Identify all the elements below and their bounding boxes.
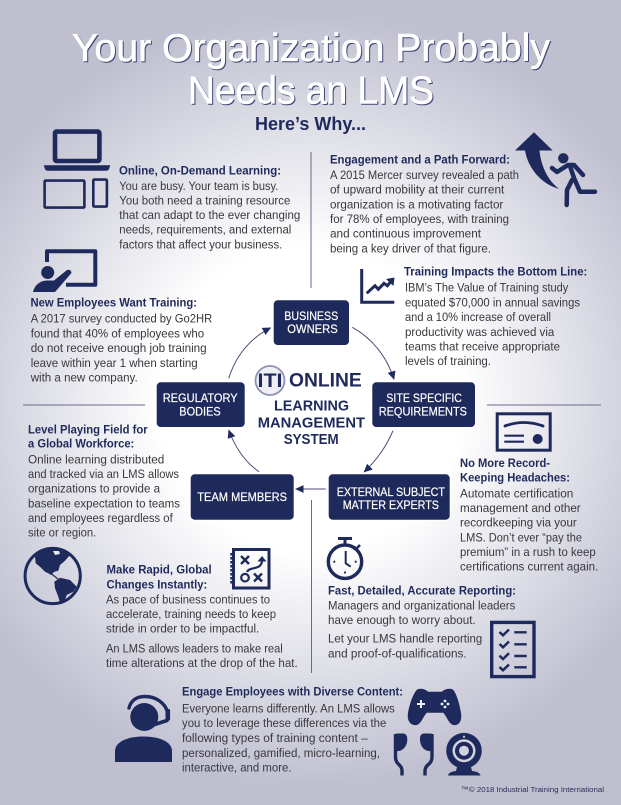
icon: strategy playbook: [232, 550, 269, 588]
text block: for 78% of employees, with training: [330, 212, 509, 226]
text block: A 2015 Mercer survey revealed a path: [330, 168, 519, 182]
heading: Training Impacts the Bottom Line:: [404, 265, 587, 279]
text block: accelerate, training needs to keep: [106, 607, 276, 621]
icon: checklist: [492, 622, 534, 677]
heading: Fast, Detailed, Accurate Reporting:: [328, 584, 516, 598]
text block: [330, 168, 519, 255]
text block: with a new company.: [30, 370, 138, 384]
text block: levels of training.: [405, 354, 491, 368]
text block: Automate certification: [460, 486, 573, 500]
icon: earbuds: [396, 734, 432, 776]
cycle diagram: [157, 300, 475, 520]
icon: rising line chart: [362, 269, 394, 302]
text block: [30, 312, 212, 384]
text block: and continuous improvement: [330, 227, 482, 241]
text block: certifications current again.: [460, 560, 598, 574]
heading: a Global Workforce:: [28, 436, 134, 450]
center logo and label: SYSTEM: [284, 431, 339, 448]
arrow: team members to regulatory bodies: [229, 430, 259, 472]
text block: that can adapt to the ever changing: [119, 208, 300, 222]
text block: teams that receive appropriate: [405, 340, 560, 354]
text block: [405, 281, 580, 368]
panel: bottom line: [362, 265, 587, 368]
text block: site or region.: [28, 526, 96, 540]
text block: and tracked via an LMS allows: [28, 467, 179, 481]
icon: stopwatch: [328, 538, 362, 578]
heading: [28, 422, 148, 450]
text block: organization is a motivating factor: [330, 197, 503, 211]
heading: Level Playing Field for: [28, 422, 148, 436]
panel: level playing field: [28, 422, 180, 540]
text block: of upward mobility at their current: [330, 183, 505, 197]
title: [72, 27, 550, 112]
box: business owners: BUSINESS: [284, 309, 338, 323]
icon: laptop, tablet and phone: [44, 132, 110, 208]
icon: person with headset: [115, 696, 172, 762]
arrow: site requirements to external experts: [364, 431, 393, 472]
heading: Make Rapid, Global: [106, 562, 212, 576]
title: Your Organization Probably: [72, 27, 550, 70]
text block: You are busy. Your team is busy.: [119, 179, 278, 193]
heading: New Employees Want Training:: [30, 296, 197, 310]
box: external subject matter experts: EXTERNAL SUBJECT: [337, 485, 445, 499]
box: business owners: OWNERS: [287, 322, 338, 336]
center logo and label: ONLINE: [289, 371, 362, 392]
copyright: ™© 2018 Industrial Training International: [461, 785, 604, 794]
box: team members: [191, 474, 294, 520]
text block: A 2017 survey conducted by Go2HR: [31, 312, 212, 326]
text block: [460, 486, 598, 574]
panel: rapid global changes: [106, 550, 298, 670]
panel: record keeping: [460, 414, 598, 574]
text block: interactive, and more.: [182, 760, 292, 774]
center logo and label: LEARNING: [274, 398, 349, 415]
text block: stride in order to be impactful.: [106, 622, 259, 636]
heading: Online, On-Demand Learning:: [119, 164, 281, 178]
box: site specific requirements: [372, 382, 475, 427]
box: site specific requirements: REQUIREMENTS: [379, 404, 467, 418]
text block: leave within year 1 when starting: [31, 356, 198, 370]
text block: needs, requirements, and external: [119, 223, 291, 237]
icon: ITI logo: ITI: [258, 371, 282, 392]
text block: As pace of business continues to: [106, 592, 270, 606]
icon: runner with upward arrow: [515, 132, 595, 205]
text block: IBM’s The Value of Training study: [405, 281, 569, 295]
text block: recordkeeping via your: [460, 516, 577, 530]
text block: organizations to provide a: [28, 482, 160, 496]
text block: LMS. Don’t ever “pay the: [460, 530, 582, 544]
heading: Engagement and a Path Forward:: [330, 152, 510, 166]
box: regulatory bodies: REGULATORY: [163, 391, 238, 405]
text block: time alterations at the drop of the hat.: [106, 656, 298, 670]
icon: webcam: [446, 733, 482, 776]
arrow: external experts to team members: [296, 488, 326, 490]
icon: certificate: [497, 414, 550, 450]
text block: baseline expectation to teams: [28, 496, 180, 510]
text block: [28, 452, 180, 540]
subtitle: Here’s Why...: [255, 114, 366, 134]
text block: [328, 598, 515, 660]
icon: presenter at board: [33, 251, 95, 292]
text block: and a 10% increase of overall: [405, 310, 551, 324]
icon: globe: [25, 547, 80, 604]
heading: Engage Employees with Diverse Content:: [182, 685, 403, 699]
panel: new employees: [30, 251, 212, 384]
text block: premium” in a rush to keep: [460, 545, 596, 559]
heading: [460, 456, 570, 485]
text block: Managers and organizational leaders: [328, 598, 515, 612]
panel: engagement: [330, 132, 595, 255]
title: Needs an LMS: [188, 69, 434, 112]
text block: you to leverage these differences via the: [182, 716, 386, 730]
text block: [106, 592, 298, 670]
icon: game controller: [408, 689, 461, 725]
text block: Online learning distributed: [28, 452, 164, 466]
box: external subject matter experts: [329, 474, 450, 520]
text block: equated $70,000 in annual savings: [405, 295, 580, 309]
text block: personalized, gamified, micro-learning,: [182, 746, 380, 760]
box: site specific requirements: SITE SPECIFIC: [386, 391, 462, 405]
text block: factors that affect your business.: [119, 237, 282, 251]
panel: reporting: [328, 538, 534, 677]
heading: Keeping Headaches:: [460, 471, 570, 485]
text block: productivity was achieved via: [405, 325, 554, 339]
text block: [182, 702, 395, 774]
text block: and employees regardless of: [28, 511, 173, 525]
text block: Everyone learns differently. An LMS allows: [182, 702, 395, 716]
text block: do not receive enough job training: [31, 341, 207, 355]
box: regulatory bodies: [157, 382, 245, 427]
arrow: regulatory bodies to business owners: [229, 328, 271, 378]
text block: An LMS allows leaders to make real: [106, 641, 283, 655]
heading: No More Record-: [460, 456, 550, 470]
box: external subject matter experts: MATTER EXPERTS: [343, 498, 439, 512]
panel: diverse content: [115, 685, 482, 776]
text block: management and other: [460, 501, 581, 515]
text block: found that 40% of employees who: [31, 326, 204, 340]
center logo and label: MANAGEMENT: [258, 414, 365, 431]
arrow: business owners to site requirements: [352, 327, 394, 379]
text block: and proof-of-qualifications.: [328, 646, 467, 660]
box: team members: TEAM MEMBERS: [197, 490, 287, 504]
heading: Changes Instantly:: [106, 578, 207, 592]
text block: have enough to worry about.: [328, 613, 476, 627]
text block: following types of training content –: [182, 731, 368, 745]
text block: You both need a training resource: [119, 194, 290, 208]
text block: Let your LMS handle reporting: [328, 632, 482, 646]
box: business owners: [274, 300, 349, 345]
text block: being a key driver of that figure.: [330, 241, 491, 255]
panel: online learning: [44, 132, 300, 251]
box: regulatory bodies: BODIES: [179, 404, 221, 418]
heading: [106, 562, 212, 592]
text block: [119, 179, 300, 251]
center logo and label: [256, 366, 365, 448]
